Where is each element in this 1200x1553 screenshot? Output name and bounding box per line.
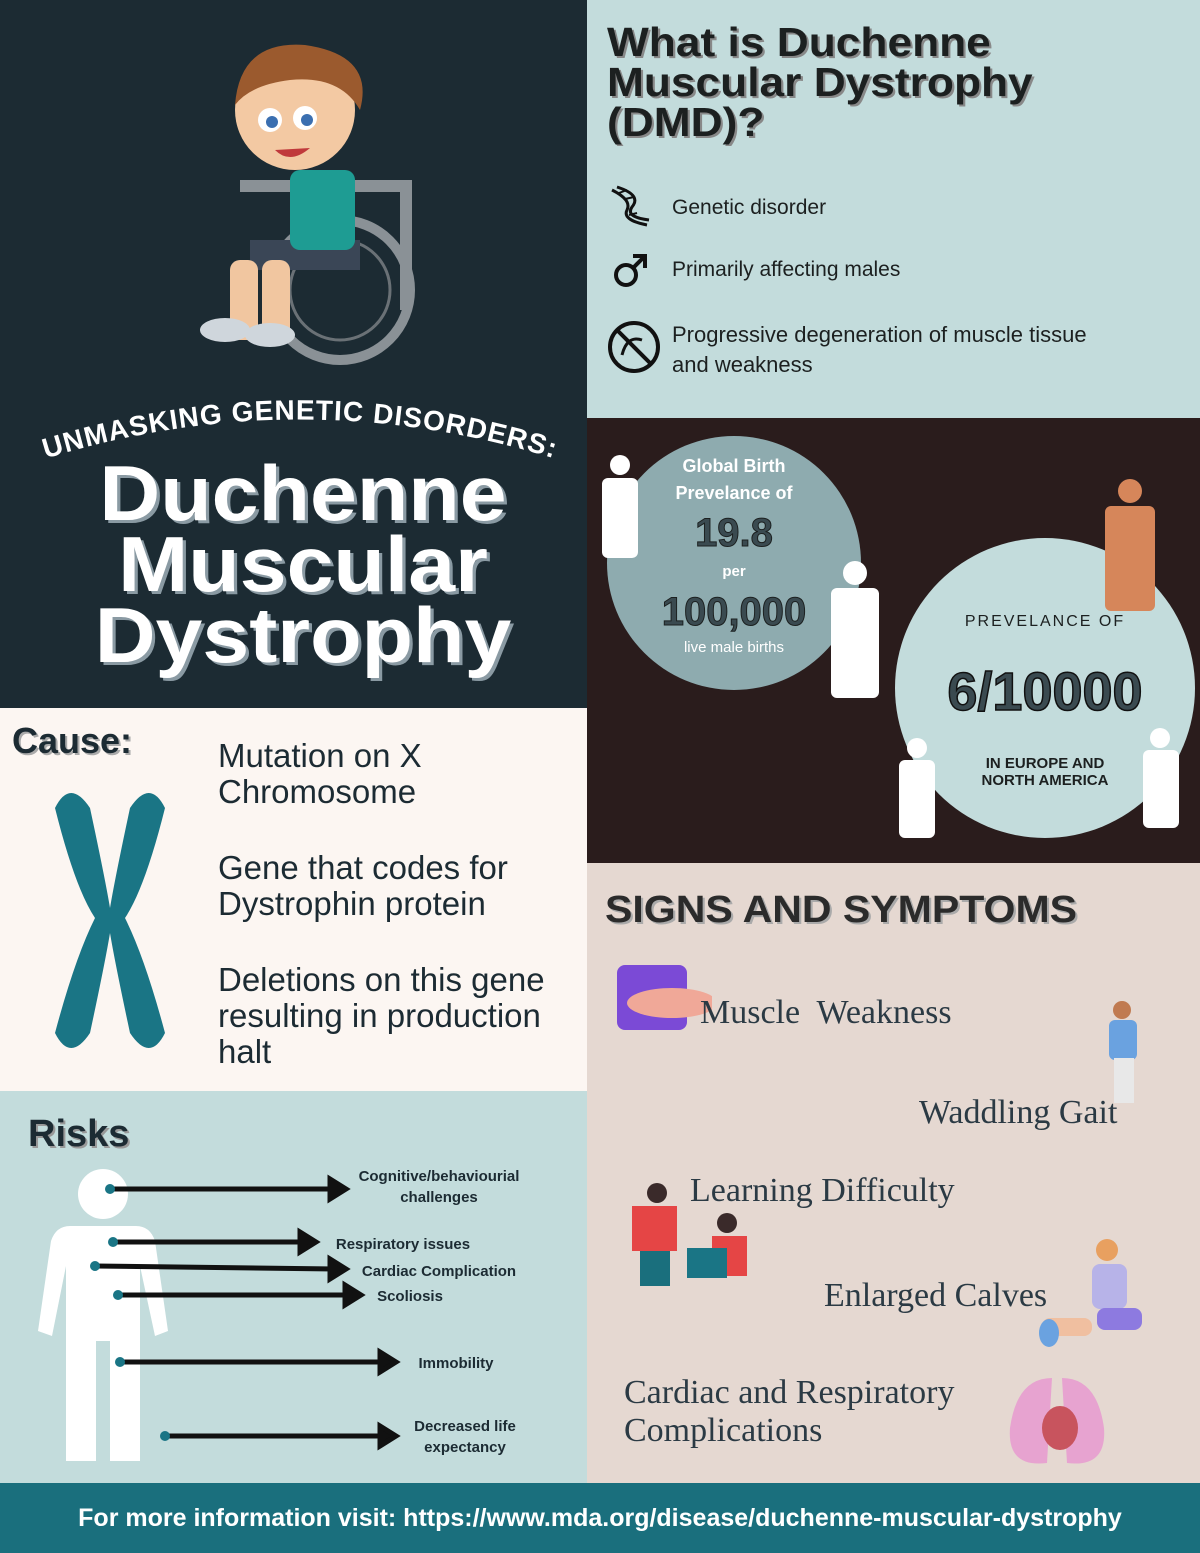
text: muscle weakness: Muscle Weakness — [700, 994, 952, 1031]
text: cardiac and respiratory — [624, 1374, 954, 1449]
stat: global birth prevalence: Global Birth — [682, 456, 786, 476]
heading: Duchenne Muscular Dystrophy: Muscular — [118, 520, 488, 608]
panel: risks — [0, 1091, 587, 1483]
panel: cause — [0, 708, 587, 1091]
heading: Duchenne Muscular Dystrophy: Duchenne — [99, 449, 507, 537]
icon: learning people — [632, 1183, 747, 1286]
stat: global birth prevalence — [607, 436, 861, 690]
icon: DNA — [611, 186, 650, 226]
heading: what is DMD: (DMD)? — [607, 99, 764, 145]
heading: risks: Risks — [28, 1113, 129, 1155]
heading: signs and symptoms: SIGNS AND SYMPTOMS — [605, 889, 1077, 931]
icon: human body with arrows: Cognitive/behaviourial — [359, 1168, 519, 1185]
icon: human body with arrows: expectancy — [424, 1439, 507, 1456]
subtitle: unmasking genetic disorders: UNMASKING GENETIC DISORDERS: — [42, 400, 555, 458]
stat: regional prevalence: PREVELANCE OF — [965, 613, 1125, 630]
panel: prevalence — [587, 418, 1200, 863]
icon: human body with arrows: Decreased life — [414, 1418, 516, 1435]
text: progressive degeneration: Progressive degeneration of muscle tissue — [672, 322, 1087, 347]
text: cause list: Mutation on X — [218, 737, 422, 774]
text: cause list: resulting in production — [218, 997, 541, 1034]
text: enlarged calves: Enlarged Calves — [824, 1277, 1047, 1314]
heading: what is DMD: Muscular Dystrophy — [607, 59, 1033, 105]
icon: boy in wheelchair — [200, 44, 415, 365]
text: cause list — [218, 737, 545, 1070]
text: genetic disorder: Genetic disorder — [672, 196, 826, 219]
text: cause list: halt — [218, 1033, 271, 1070]
text: primarily affecting males: Primarily affecting males — [672, 258, 900, 281]
heading: Duchenne Muscular Dystrophy: Dystrophy — [95, 591, 511, 679]
panel: title — [0, 0, 587, 708]
icon: walking person — [1109, 1001, 1137, 1103]
stat: regional prevalence — [895, 538, 1195, 838]
icon: muscle weakness arm — [617, 965, 712, 1030]
stat: global birth prevalence: live male births — [684, 639, 784, 656]
icon: human body with arrows — [38, 1168, 519, 1461]
icon: male symbol — [614, 254, 647, 287]
text: progressive degeneration — [672, 322, 1087, 377]
text: cause list: Dystrophin protein — [218, 885, 486, 922]
stat: global birth prevalence: 100,000 — [662, 590, 806, 634]
stat: regional prevalence: 6/10000 — [947, 662, 1143, 722]
icon: human body with arrows: Scoliosis — [377, 1288, 443, 1305]
icon: human body with arrows: Immobility — [418, 1355, 494, 1372]
icon: human body with arrows: Cardiac Complication — [362, 1263, 516, 1280]
heading: what is DMD — [607, 19, 1035, 146]
icon: human body with arrows: challenges — [400, 1189, 478, 1206]
stat: global birth prevalence: 19.8 — [695, 511, 773, 555]
text: cardiac and respiratory: Cardiac and Respiratory — [624, 1374, 954, 1411]
stat: regional prevalence: IN EUROPE AND — [986, 755, 1104, 772]
text: cause list: Chromosome — [218, 773, 416, 810]
text: waddling gait: Waddling Gait — [919, 1094, 1117, 1131]
heading: Duchenne Muscular Dystrophy — [95, 449, 514, 681]
stat: global birth prevalence: per — [722, 563, 746, 580]
icon: human body with arrows: Respiratory issues — [336, 1236, 470, 1253]
icons: people figures — [602, 455, 1179, 838]
text: cause list: Deletions on this gene — [218, 961, 545, 998]
icon: lungs — [1010, 1378, 1104, 1464]
footer — [0, 1483, 1200, 1553]
text: cause list: Gene that codes for — [218, 849, 508, 886]
icon: sitting person calves — [1039, 1239, 1142, 1347]
panel: what is DMD — [587, 0, 1200, 418]
stat: regional prevalence: NORTH AMERICA — [982, 772, 1109, 789]
icon: X chromosome — [55, 793, 165, 1048]
stat: global birth prevalence: Prevelance of — [675, 483, 794, 503]
text: cardiac and respiratory: Complications — [624, 1412, 822, 1449]
footer: For more information visit: https://www.mda.org/disease/duchenne-muscular-dystrophy — [78, 1504, 1122, 1532]
text: learning difficulty: Learning Difficulty — [690, 1172, 955, 1209]
icon: no muscle — [608, 321, 660, 373]
panel: signs and symptoms — [587, 863, 1200, 1483]
heading: cause: Cause: — [12, 720, 132, 761]
heading: what is DMD: What is Duchenne — [607, 19, 991, 65]
text: progressive degeneration: and weakness — [672, 352, 813, 377]
